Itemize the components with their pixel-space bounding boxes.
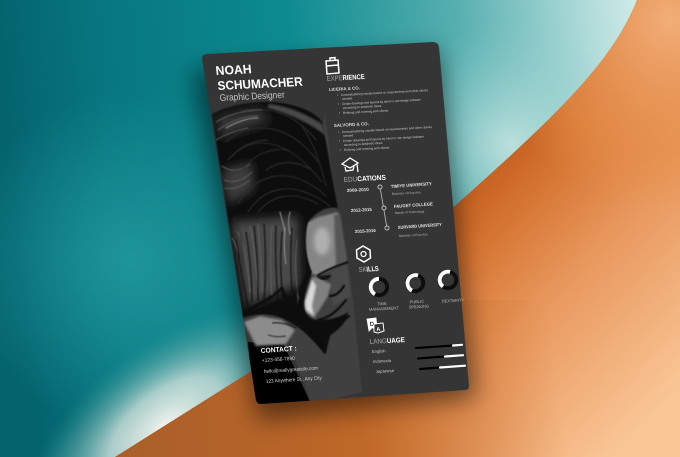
job: salvord bbox=[334, 121, 433, 152]
icon: hexagon gear bbox=[356, 246, 370, 262]
schools: XURVARD UNIVERSITY bbox=[398, 222, 442, 230]
hair: midtone patches bbox=[216, 108, 300, 306]
heading: experience: EXPERIENCE bbox=[327, 74, 365, 83]
years: 2015-2016 bbox=[355, 228, 377, 234]
card shadow bbox=[192, 50, 476, 420]
panel: skills bbox=[356, 246, 465, 312]
job: liceria: needed bbox=[342, 96, 353, 101]
name heading: SCHUMACHER bbox=[217, 75, 303, 93]
job: salvord: • bbox=[338, 130, 339, 134]
job: salvord: SALVORD & CO. bbox=[334, 121, 369, 128]
contact details bbox=[262, 356, 323, 385]
schools: FAUGET COLLEGE bbox=[394, 201, 433, 209]
language names: English bbox=[372, 348, 387, 354]
panel: contact bbox=[261, 346, 323, 385]
job: liceria: • bbox=[337, 93, 338, 97]
name heading: Graphic Designer bbox=[219, 90, 286, 104]
resume card bbox=[202, 42, 469, 406]
face: nose bbox=[304, 276, 331, 318]
job: liceria: LICERIA & CO. bbox=[329, 85, 360, 92]
skill labels bbox=[369, 297, 465, 312]
skill labels: SPEAKING bbox=[408, 303, 429, 310]
card background bbox=[202, 42, 469, 404]
icon: speech bubbles: D bbox=[370, 322, 375, 328]
face: cheek bbox=[331, 266, 350, 304]
contact details: hello@reallygreatsite.com bbox=[264, 366, 318, 375]
panel: experience bbox=[326, 58, 433, 152]
job: liceria: • bbox=[338, 102, 339, 106]
job: salvord: • bbox=[339, 139, 340, 143]
panel: educations bbox=[342, 158, 442, 238]
photo backdrop bbox=[290, 112, 362, 404]
language names bbox=[372, 348, 395, 374]
job: salvord: • bbox=[340, 148, 341, 152]
portrait photo bbox=[212, 102, 362, 406]
language bars bbox=[416, 345, 465, 369]
contact details: +123-456-7890 bbox=[262, 356, 295, 364]
face: right shadow bbox=[334, 214, 347, 266]
language names: Indonesia bbox=[373, 358, 392, 364]
heading: contact: CONTACT : bbox=[261, 346, 297, 355]
skill labels: PUBLIC bbox=[409, 299, 424, 304]
panel: language bbox=[367, 318, 465, 374]
job: salvord: Conceptualizing visuals based on requirements and other clients bbox=[342, 125, 433, 134]
face: forehead bbox=[305, 211, 346, 276]
years: 2012-2015 bbox=[351, 207, 373, 213]
heading: educations: EDUCATIONS bbox=[344, 175, 386, 184]
face bbox=[303, 211, 350, 318]
skill labels: TIME bbox=[377, 301, 387, 306]
main hair mass bbox=[212, 102, 348, 354]
donut: dexterity bbox=[440, 272, 456, 288]
donut: public speaking bbox=[407, 275, 423, 291]
schools: TIMIYE UNIVERSITY bbox=[391, 181, 432, 189]
name heading bbox=[215, 62, 303, 104]
heading: skills: SKILLS bbox=[359, 266, 379, 274]
chin bbox=[244, 316, 296, 346]
face: nose highlight bbox=[305, 279, 316, 316]
job: salvord: Create drawings and layouts by hand or use design software bbox=[343, 135, 424, 143]
job: liceria: Create drawings and layouts by hand or use design software bbox=[342, 98, 421, 106]
timeline bbox=[378, 185, 389, 230]
years bbox=[347, 187, 377, 234]
job: salvord: according to aesthetic ideas bbox=[344, 141, 383, 147]
job: liceria: Refining and meeting with clients bbox=[343, 108, 389, 115]
schools: Master of Technology bbox=[395, 209, 425, 215]
job: salvord: needed bbox=[343, 133, 354, 138]
contact details: 123 Anywhere St., Any City bbox=[266, 375, 323, 385]
hair: fine strands bbox=[216, 109, 349, 352]
name heading: NOAH bbox=[215, 62, 252, 78]
hair: top edge sheen bbox=[268, 104, 326, 136]
face: forehead highlight bbox=[314, 227, 330, 255]
icon: speech bubbles bbox=[367, 318, 384, 333]
schools bbox=[391, 181, 442, 238]
schools: Bachelor of Fine Arts bbox=[392, 190, 421, 196]
language names: Japanese bbox=[376, 368, 395, 374]
icon: graduation cap bbox=[342, 158, 358, 172]
face: eye bbox=[318, 275, 331, 279]
job: liceria: according to aesthetic ideas bbox=[343, 104, 382, 110]
heading: language: LANGUAGE bbox=[370, 337, 405, 346]
icon: briefcase bbox=[326, 58, 339, 74]
skill labels: DEXTERITY bbox=[441, 297, 465, 304]
black corner bbox=[248, 342, 311, 406]
job: salvord: Refining and meeting with clients bbox=[344, 145, 390, 152]
icon: speech bubbles: A bbox=[376, 327, 381, 333]
schools: Bachelor of Fine Arts bbox=[399, 232, 428, 238]
years: 2009-2010 bbox=[347, 187, 370, 193]
donut: time management bbox=[371, 279, 387, 295]
job: liceria: Conceptualizing visuals based on requirements and other clients bbox=[341, 88, 429, 97]
job: liceria bbox=[329, 85, 429, 115]
job: liceria: • bbox=[339, 111, 340, 115]
face: eyebrow bbox=[317, 262, 348, 276]
skill labels: MANAGEMENT bbox=[369, 305, 400, 312]
